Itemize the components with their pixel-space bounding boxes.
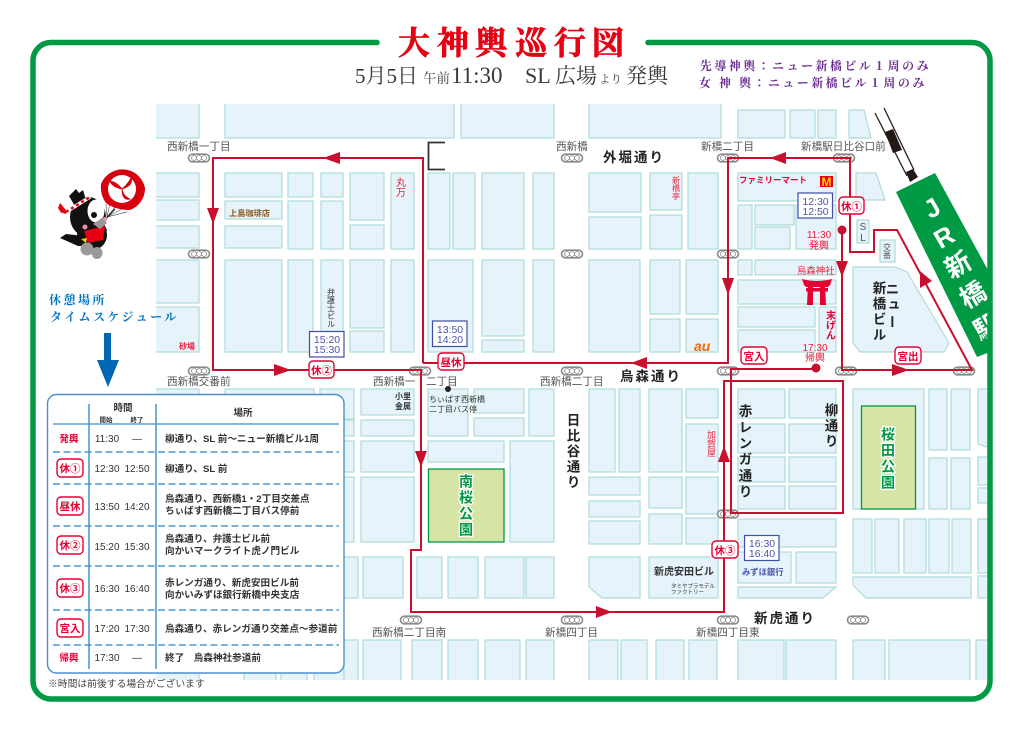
- time boxes: 16:40: [749, 548, 775, 560]
- time boxes: 15:20: [314, 334, 340, 346]
- row times: 16:40: [124, 584, 150, 595]
- route arrows: [207, 152, 932, 618]
- map labels: タミヤプラモデル: [671, 582, 716, 590]
- stop badges: 宮入: [744, 350, 765, 363]
- row places: ちぃばす西新橋二丁目バス停前: [165, 505, 300, 517]
- stop labels: 西新橋一: [373, 375, 416, 388]
- street names: 烏森通り: [620, 368, 682, 384]
- map labels: 烏森神社: [797, 265, 835, 276]
- table header: 場所: [233, 407, 253, 419]
- stop badges: 休①: [841, 200, 862, 213]
- JR Shimbashi station band: 新: [939, 246, 977, 284]
- row labels: 発輿: [59, 433, 79, 445]
- row places: 赤レンガ通り、新虎安田ビル前: [165, 577, 299, 589]
- row times: 14:20: [124, 502, 150, 513]
- map labels: 金属: [395, 401, 411, 411]
- icon: fan: [101, 169, 145, 220]
- torii shrine icon: [802, 279, 832, 305]
- stop badges: 昼休: [440, 356, 462, 369]
- row times: 12:30: [94, 464, 120, 475]
- street names: [564, 149, 898, 626]
- icon: bird body: [58, 189, 107, 259]
- date and departure: 5月5日: [355, 64, 418, 88]
- row places: 烏森通り、弁護士ビル前: [165, 533, 271, 545]
- row times: 17:30: [94, 653, 120, 664]
- stop badges: 宮出: [898, 350, 918, 363]
- map blocks: [150, 100, 998, 685]
- row labels: 帰輿: [59, 652, 79, 664]
- map labels: ファクトリー: [671, 589, 704, 596]
- row labels: 宮入: [60, 622, 81, 635]
- map labels: SL: [858, 222, 868, 244]
- stop labels: 新橋駅日比谷口前: [801, 140, 886, 153]
- time boxes: 16:30: [749, 538, 775, 550]
- park: Minami Sakura Park: [428, 469, 504, 542]
- purple notes: 女 神 輿：ニュー新橋ビル１周のみ: [699, 74, 927, 91]
- table header: 開始: [100, 415, 113, 424]
- map labels: 帰輿: [805, 351, 825, 364]
- street names: 柳通り: [822, 403, 838, 450]
- railway line: [875, 108, 918, 182]
- map labels: 加賀屋: [706, 430, 716, 458]
- rest schedule heading: 休憩場所: [49, 291, 107, 308]
- map labels: みずほ銀行: [742, 567, 784, 577]
- stop labels: 新橋四丁目東: [696, 626, 760, 639]
- map labels: 末げん: [824, 309, 836, 340]
- row times: 16:30: [94, 584, 120, 595]
- time boxes: 15:30: [314, 344, 340, 356]
- title: 大神輿巡行図: [398, 18, 624, 64]
- bracket mark: [428, 142, 445, 170]
- JR Shimbashi station band: J: [918, 191, 946, 225]
- street names: 日比谷通り: [564, 413, 580, 490]
- map labels: 丸万: [394, 176, 406, 198]
- table header: 時間: [113, 402, 133, 414]
- row times: 15:20: [94, 542, 120, 553]
- row places: 柳通り、SL 前: [165, 463, 228, 475]
- street names: 赤レンガ通り: [736, 404, 752, 501]
- map labels: 17:30: [802, 343, 828, 354]
- time boxes: 14:20: [437, 334, 463, 346]
- stop badges: 休②: [311, 364, 332, 377]
- row labels: [57, 433, 83, 664]
- park: Sakurada Park: [862, 406, 916, 509]
- map labels: 小里: [395, 391, 411, 401]
- row times: 17:20: [94, 624, 120, 635]
- row places: 柳通り、SL 前～ニュー新橋ビル1周: [165, 433, 319, 445]
- stop labels: 新橋四丁目: [545, 626, 598, 639]
- schedule table: [48, 394, 344, 673]
- map labels: ちぃばす西新橋: [429, 394, 485, 404]
- JR Shimbashi station band: R: [928, 219, 960, 255]
- row times: ―: [132, 434, 142, 445]
- arrow down to schedule: [97, 333, 119, 387]
- date and departure: 11:30: [451, 63, 503, 88]
- table header: [100, 402, 253, 424]
- date and departure: 広場: [555, 64, 597, 88]
- purple notes: [699, 57, 931, 91]
- map labels: 新橋亭: [672, 176, 680, 201]
- date and departure: 午前: [423, 71, 450, 86]
- stop labels: 西新橋交番前: [167, 375, 231, 388]
- stop labels: 新橋二丁目: [701, 140, 754, 153]
- mascot bird with fan: [58, 169, 145, 259]
- street names: 外堀通り: [603, 149, 665, 165]
- map labels: 交番: [882, 243, 892, 260]
- row labels: 休②: [60, 539, 81, 552]
- traffic signals: [188, 154, 974, 624]
- map labels: 二丁目バス停: [429, 404, 477, 414]
- row times: 15:30: [124, 542, 150, 553]
- row times: ―: [132, 653, 142, 664]
- stop labels: 西新橋二丁目: [540, 375, 604, 388]
- JR Shimbashi station band: 橋: [954, 276, 992, 314]
- row places: [165, 433, 338, 664]
- stop labels: [167, 140, 886, 639]
- street names: 新橋ビル: [870, 281, 886, 343]
- stop badges: 休③: [714, 544, 736, 557]
- stop labels: 西新橋二丁目南: [372, 626, 446, 639]
- row places: 終了 烏森神社参道前: [165, 652, 261, 664]
- row places: 烏森通り、赤レンガ通り交差点～参道前: [165, 623, 338, 635]
- footnote: ※時間は前後する場合がございます: [48, 677, 205, 690]
- map labels: 上島珈琲店: [229, 208, 270, 218]
- date and departure: SL: [525, 63, 551, 88]
- purple notes: 先導神輿：ニュー新橋ビル１周のみ: [700, 57, 931, 74]
- table header: 終了: [130, 415, 144, 424]
- map labels: 砂場: [179, 341, 195, 351]
- stop badges: [309, 197, 921, 558]
- map labels: 11:30: [807, 230, 832, 241]
- street names: ニュー: [884, 282, 898, 332]
- parade route: [213, 158, 972, 612]
- row times: 12:50: [124, 464, 150, 475]
- time boxes: 13:50: [437, 324, 463, 336]
- JR Shimbashi station band: [896, 173, 988, 357]
- row places: 向かいみずほ銀行新橋中央支店: [165, 589, 300, 601]
- JR Shimbashi station band: 駅: [968, 308, 1006, 346]
- map labels: 弁護士ビル: [326, 287, 336, 328]
- time boxes: 12:30: [802, 196, 829, 208]
- rest schedule heading: タイムスケジュール: [50, 308, 179, 325]
- row times: 11:30: [95, 434, 120, 445]
- row labels: 休③: [60, 582, 81, 595]
- row places: 烏森通り、西新橋1・2丁目交差点: [165, 493, 310, 505]
- time boxes: 12:50: [802, 206, 829, 218]
- street names: 新虎通り: [754, 610, 816, 626]
- park: Sakurada Park: 桜田公園: [880, 426, 896, 491]
- stop labels: 西新橋一丁目: [167, 140, 231, 153]
- date and departure: より: [599, 73, 622, 86]
- stop labels: 西新橋: [556, 140, 588, 153]
- row times: 17:30: [124, 624, 150, 635]
- map labels: 発輿: [809, 239, 829, 252]
- table grid: [53, 404, 339, 669]
- McDonald's logo: M: [822, 175, 832, 189]
- row labels: 休①: [60, 462, 81, 475]
- park: Minami Sakura Park: 南桜公園: [458, 474, 474, 538]
- date and departure: 発輿: [626, 64, 669, 88]
- map labels: [179, 175, 892, 596]
- row times: [94, 434, 150, 664]
- row labels: 昼休: [60, 500, 81, 513]
- map labels: au: [694, 338, 711, 354]
- rest schedule heading: [49, 291, 179, 325]
- stop labels: 二丁目: [426, 376, 458, 388]
- map labels: 新虎安田ビル: [654, 565, 714, 578]
- map labels: ファミリーマート: [739, 175, 807, 185]
- time boxes: [310, 193, 832, 560]
- row places: 向かいマークライト虎ノ門ビル: [165, 545, 300, 557]
- row times: 13:50: [94, 502, 120, 513]
